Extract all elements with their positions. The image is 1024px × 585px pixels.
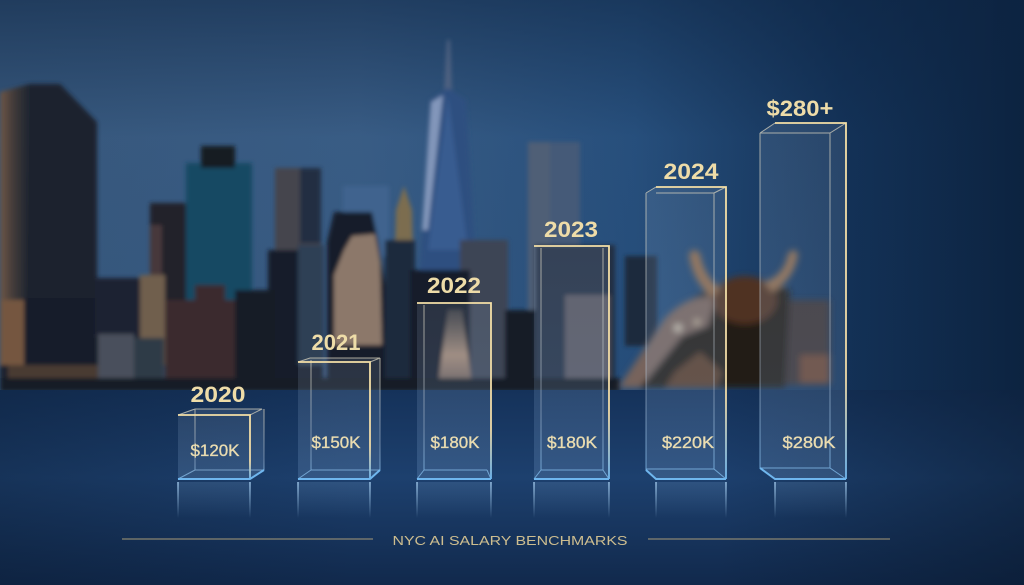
skyline: low waterfront buildings xyxy=(0,275,620,392)
label: value $180K: $180K xyxy=(430,433,480,452)
label: value $280K: $280K xyxy=(782,433,836,452)
skyline: teal tower xyxy=(186,146,252,313)
bar: 2023 $180K xyxy=(534,217,609,479)
label: year 2021: 2021 xyxy=(312,330,360,355)
bull: torso xyxy=(625,282,790,388)
skyline: One World Trade tower xyxy=(420,40,476,270)
skyline: large dark building at left xyxy=(0,84,124,380)
label: year 2023: 2023 xyxy=(544,217,598,242)
bar: 2020 $120K xyxy=(178,382,264,479)
bull: left horn xyxy=(689,250,720,298)
skyline: dark tower and lit tan building xyxy=(327,212,415,380)
skyline: far blue tower xyxy=(343,186,389,256)
tabletop surface xyxy=(0,390,1024,585)
bar: 2024 $220K xyxy=(646,159,726,479)
label: value $220K: $220K xyxy=(662,433,715,452)
bull: right rear body xyxy=(780,300,830,385)
bull: right horn xyxy=(764,250,798,292)
label: year 2022: 2022 xyxy=(427,273,481,298)
caption: NYC AI Salary Benchmarks: NYC AI SALARY BENCHMARKS xyxy=(392,533,628,548)
label: value $120K: $120K xyxy=(190,441,240,460)
bull: muzzle lights xyxy=(665,352,722,388)
label: value $150K: $150K xyxy=(312,433,361,452)
label: year 2020: 2020 xyxy=(190,382,246,407)
skyline: rear towers xyxy=(150,142,657,346)
bull: shoulder highlight xyxy=(618,297,716,388)
label: year 2024: 2024 xyxy=(664,159,719,184)
skyline: buildings behind 2022 bar xyxy=(410,240,615,385)
bar: 2021 $150K xyxy=(298,330,380,479)
background: blurred charging bull xyxy=(618,250,830,388)
background: dusk sky xyxy=(0,0,1024,392)
bar: 2022 $180K xyxy=(417,273,491,479)
skyline: grey striped tower xyxy=(268,168,324,380)
bull: head xyxy=(713,276,777,324)
label: $280+: $280+ xyxy=(766,96,834,121)
label: value $180K: $180K xyxy=(547,433,598,452)
bar reflections on table xyxy=(177,482,847,518)
background: blurred NYC skyline xyxy=(0,40,657,392)
bar: 2025 $280K xyxy=(760,96,846,479)
skyline: gold spire tower xyxy=(394,186,414,290)
